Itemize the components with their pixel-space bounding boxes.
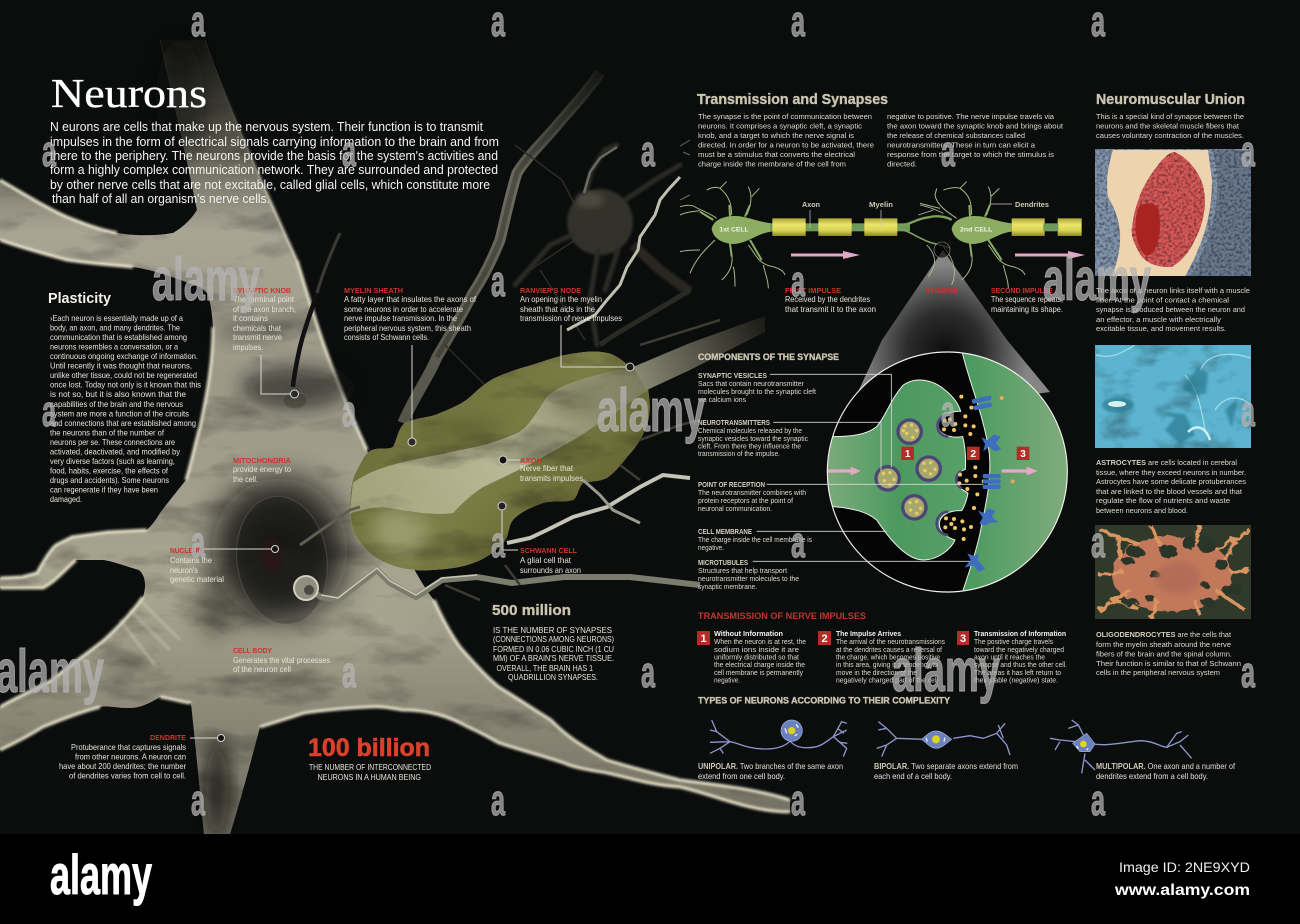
stat: 100 billion — [308, 734, 431, 782]
first cell dendrites and body: 1st CELL — [719, 227, 749, 234]
intro column 2: directed. — [887, 162, 917, 168]
component: cell membrane: The charge inside the cell membrane is — [698, 537, 812, 544]
component: neurotransmitters: cleft. From there they influence the — [698, 444, 801, 450]
dark shading on the cell body — [120, 40, 430, 838]
component: neurotransmitters: NEUROTRANSMITTERS — [698, 420, 770, 427]
step 3: axon until it reaches the — [974, 654, 1045, 662]
step 2: The Impulse Arrives — [836, 631, 901, 638]
plasticity body text: activated, deactivated, and modified by — [50, 446, 181, 456]
stat: 500 million: OVERALL, THE BRAIN HAS 1 — [496, 663, 593, 673]
neuron main body — [0, 40, 790, 838]
watermarks: a — [1091, 776, 1105, 825]
intro text: impulses in the form of electrical signals carrying information to the brain and from — [50, 134, 499, 149]
caption: bipolar — [874, 761, 1018, 781]
label: axon: Nerve fiber that — [520, 463, 574, 473]
label: synaptic knob: chemicals that — [233, 323, 282, 333]
impulse arrow 1 — [791, 251, 860, 259]
intro text: form a highly complex communication network. They are surrounded and protected — [50, 162, 498, 177]
axon terminal branches — [900, 205, 954, 285]
step 1: negative. — [714, 678, 740, 685]
stat: 100 billion: THE NUMBER OF INTERCONNECTED — [309, 762, 431, 772]
label: cell body: Generates the vital processes — [233, 655, 330, 665]
caption: multipolar: MULTIPOLAR. One axon and a number of — [1096, 761, 1236, 771]
watermarks: a — [42, 127, 56, 176]
label: second impulse: The sequence repeats, — [991, 294, 1063, 304]
caption: bipolar: BIPOLAR. Two separate axons extend from — [874, 761, 1018, 771]
text: astrocytes: Astrocytes have some delicate protuberances — [1096, 479, 1247, 486]
label: synaptic knob — [233, 286, 296, 352]
section heading: TRANSMISSION OF NERVE IMPULSES — [698, 611, 866, 622]
diagram labels: Myelin — [869, 200, 893, 209]
postsynaptic cell — [962, 350, 1070, 595]
label: ranvier's node — [520, 286, 622, 323]
text: oligodendrocytes: fibers of the brain and the spinal column. — [1096, 652, 1232, 658]
step 3: their stable (negative) state. — [974, 678, 1058, 685]
text: astrocytes: tissue, where they exceed neurons in number. — [1096, 470, 1246, 477]
watermarks: a — [491, 257, 505, 306]
intro column 2: neurotransmitters. These in turn can elicit a — [887, 142, 1035, 150]
text: neuron to muscle link: fiber. At the point of contact a chemical — [1096, 298, 1229, 304]
label: first impulse: Received by the dendrites — [785, 294, 870, 304]
label: synaptic knob: SYNAPTIC KNOB — [233, 286, 291, 295]
label: ranvier's node: An opening in the myelin — [520, 294, 602, 304]
footer url: www.alamy.com — [1114, 882, 1250, 899]
plasticity body text: damaged. — [50, 494, 82, 504]
watermarks: a — [791, 776, 805, 825]
watermarks: a — [1241, 648, 1255, 697]
label: myelin sheath: A fatty layer that insulates the axons of — [344, 294, 477, 304]
plasticity body text: food, habits, exercise, the effects of — [50, 466, 169, 476]
label: synaptic knob: it contains — [233, 313, 268, 323]
panel: transmission and synapses — [680, 91, 1085, 420]
watermarks: a — [342, 127, 356, 176]
heading: Neuromuscular Union — [1096, 92, 1245, 108]
stat: 500 million: IS THE NUMBER OF SYNAPSES — [493, 625, 612, 635]
intro column 1: neurons. It comprises a synaptic cleft, a synaptic — [698, 124, 863, 130]
component: microtubules — [698, 560, 799, 591]
intro column 1 — [698, 114, 874, 168]
step 2: the charge, which becomes positive — [836, 654, 940, 662]
step 2: The arrival of the neurotransmissions — [836, 639, 945, 646]
step 3: toward the negatively charged — [974, 647, 1064, 654]
icon: multipolar neuron — [1050, 720, 1192, 773]
label: synaptic knob: The terminal point — [233, 294, 295, 304]
step 3 — [957, 631, 1067, 685]
component: neurotransmitters: synaptic vesicles toward the synaptic — [698, 436, 808, 443]
second cell: 2nd CELL — [960, 227, 992, 234]
label: synapse: SYNAPSE — [925, 286, 958, 295]
watermarks: a — [791, 257, 805, 306]
icon: bipolar neuron — [877, 722, 1010, 757]
intro text: neurons and the skeletal muscle fibers that — [1096, 124, 1239, 130]
watermarks: a — [191, 776, 205, 825]
label: first impulse — [785, 286, 876, 314]
text: neuron to muscle link: synapse is produced between the neuron and — [1096, 307, 1245, 314]
watermarks: a — [791, 518, 805, 567]
caption: unipolar: UNIPOLAR. Two branches of the same axon — [698, 761, 843, 771]
plasticity body text: very diverse factors (such as learning, — [50, 456, 175, 466]
intro text: there to the periphery. The neurons provide the basis for the system's activities and — [50, 148, 498, 163]
stat: 500 million: FORMED IN 0.06 CUBIC INCH (1 CU — [493, 644, 614, 654]
label: schwann cell — [520, 546, 581, 575]
diagram labels: Axon — [802, 200, 820, 209]
component: synaptic vesicles: SYNAPTIC VESICLES — [698, 373, 767, 380]
intro column 1: directed. In order for a neuron to be activated, there — [698, 142, 874, 150]
presynaptic terminal — [823, 380, 968, 560]
label: myelin sheath: peripheral nervous system, this sheath — [344, 323, 471, 333]
component: point of reception — [698, 482, 806, 513]
plasticity body text: system are more a function of the circuits — [50, 408, 189, 418]
label: dendrite: of dendrites varies from cell to cell. — [69, 770, 186, 780]
component: microtubules: MICROTUBULES — [698, 560, 748, 567]
component: cell membrane: CELL MEMBRANE — [698, 529, 752, 536]
magnified synapse circle — [753, 350, 1070, 595]
label: dendrite: DENDRITE — [150, 733, 186, 742]
label: mitochondria: MITOCHONDRIA — [233, 456, 291, 465]
intro text: causes voluntary contraction of the muscles. — [1096, 133, 1244, 140]
panel: plasticity — [48, 290, 201, 504]
impulse arrows — [827, 467, 861, 475]
label: nucleus: NUCLEUS — [170, 546, 202, 555]
callout leader lines — [190, 325, 634, 742]
intro column 1: knob, and a target to which the nerve signal is — [698, 133, 855, 140]
component: synaptic vesicles: molecules brought to the synaptic cleft — [698, 389, 816, 396]
stat: 100 billion: NEURONS IN A HUMAN BEING — [318, 772, 421, 782]
plasticity body text: neurons per se. These connections are — [50, 437, 175, 447]
intro text — [50, 119, 499, 206]
vesicles — [876, 415, 962, 535]
photo: neuromuscular junction micrograph — [1095, 149, 1251, 276]
text: neuron to muscle link: The axon of a neuron links itself with a muscle — [1096, 288, 1250, 295]
label: ranvier's node: RANVIER'S NODE — [520, 286, 581, 295]
watermarks: a — [191, 518, 205, 567]
watermarks: a — [1091, 518, 1105, 567]
watermarks: a — [941, 387, 955, 436]
step markers: 1 — [905, 449, 911, 460]
step 3: The areas it has left return to — [974, 670, 1061, 677]
text: neuron to muscle link — [1096, 288, 1250, 333]
label: nucleus: genetic material — [170, 574, 224, 584]
step 1 — [697, 631, 806, 685]
footer bar — [0, 834, 1300, 924]
label: schwann cell: surrounds an axon — [520, 565, 581, 575]
myelin blocks — [772, 218, 1082, 236]
axon — [770, 223, 910, 231]
photo: astrocytes micrograph — [1095, 345, 1251, 448]
stat: 500 million: 500 million — [492, 602, 571, 619]
second cell — [920, 182, 1058, 288]
label: nucleus — [170, 546, 224, 584]
intro text: by other nerve cells that are not excitable, called glial cells, which constitute more — [50, 177, 490, 192]
step 2: move in the direction of the — [836, 670, 917, 677]
label: schwann cell: SCHWANN CELL — [520, 546, 577, 555]
step markers — [901, 447, 1029, 460]
receptors — [965, 395, 1001, 572]
step 2: in this area, giving it a tendency to — [836, 662, 938, 669]
intro column 2: the release of chemical substances called — [887, 133, 1025, 140]
label: dendrite — [59, 733, 186, 780]
component: synaptic vesicles: via calcium ions — [698, 397, 746, 404]
illustration: large neuron scene — [0, 40, 790, 838]
caption: multipolar: dendrites extend from a cell body. — [1096, 771, 1208, 781]
intro column 2: negative to positive. The nerve impulse travels via — [887, 114, 1054, 121]
intro column 1: charge inside the membrane of the cell from — [698, 162, 846, 168]
label: myelin sheath: consists of Schwann cells. — [344, 332, 429, 342]
plasticity body text — [50, 313, 201, 504]
plasticity body text: drugs and accidents). Some neurons — [50, 475, 169, 485]
caption: bipolar: each end of a cell body. — [874, 771, 952, 781]
impulse arrow 2 — [1015, 251, 1085, 259]
plasticity body text: and connections that are established among — [50, 418, 196, 428]
text: neuron to muscle link: an effector, a muscle with electrically — [1096, 317, 1222, 324]
watermarks: alamy — [152, 246, 260, 313]
plasticity heading: Plasticity — [48, 290, 112, 307]
watermarks: alamy — [0, 638, 104, 705]
step 2: 2 — [821, 633, 828, 645]
label: dendrite: Protuberance that captures signals — [71, 742, 186, 752]
label: second impulse — [991, 286, 1063, 314]
components heading: COMPONENTS OF THE SYNAPSE — [698, 352, 839, 362]
panel: types of neurons — [698, 696, 1236, 781]
label: axon: AXON — [520, 456, 542, 465]
plasticity body text: continuous ongoing exchange of information. — [50, 351, 198, 361]
first cell dendrites and body — [680, 182, 785, 288]
footer logo: alamy — [50, 843, 152, 906]
label: mitochondria: provide energy to — [233, 464, 291, 474]
label: mitochondria: the cell. — [233, 474, 258, 484]
component: point of reception: neuronal communication. — [698, 506, 772, 513]
plasticity body text: the neurons than of the number of — [50, 427, 165, 437]
panel: components of the synapse — [698, 350, 1070, 595]
plasticity body text: once lost. Today not only is it known that this — [50, 380, 201, 390]
types heading: TYPES OF NEURONS ACCORDING TO THEIR COMPLEXITY — [698, 696, 951, 706]
step 3: synapse and thus the other cell. — [974, 662, 1067, 669]
caption: unipolar: extend from one cell body. — [698, 771, 785, 781]
label: mitochondria — [233, 456, 291, 484]
intro text — [1096, 114, 1244, 140]
component: microtubules: neurotransmitter molecules to the — [698, 576, 799, 583]
nerve fibers in front — [294, 320, 720, 600]
text: oligodendrocytes: Their function is similar to that of Schwann — [1096, 661, 1241, 668]
watermarks: a — [491, 518, 505, 567]
label: synaptic knob: transmit nerve — [233, 332, 282, 342]
label: cell body: of the neuron cell — [233, 664, 291, 674]
synaptic knob fiber — [283, 233, 340, 408]
component: neurotransmitters: transmission of the impulse. — [698, 451, 780, 458]
intro text: than half of all an organism's nerve cells. — [52, 191, 270, 206]
diagram labels: Dendrites — [1015, 200, 1049, 209]
component: neurotransmitters: Chemical molecules released by the — [698, 428, 802, 435]
caption: unipolar — [698, 761, 843, 781]
watermarks: a — [941, 127, 955, 176]
component: synaptic vesicles: Sacs that contain neurotransmitter — [698, 381, 805, 388]
step markers: 3 — [1020, 449, 1026, 460]
intro text: N eurons are cells that make up the nervous system. Their function is to transmit — [50, 119, 483, 134]
label: cell body: CELL BODY — [233, 646, 272, 655]
step 2: negatively charged part of the cell — [836, 678, 938, 685]
step 1: 1 — [700, 633, 707, 645]
label: second impulse: maintaining its shape. — [991, 304, 1063, 314]
text: astrocytes: between neurons and blood. — [1096, 508, 1188, 515]
text: astrocytes — [1096, 460, 1247, 515]
label: synaptic knob: impulses. — [233, 342, 263, 352]
text: astrocytes: regulate the flow of nutrients and waste — [1096, 498, 1230, 505]
intro text: This is a special kind of synapse between the — [1096, 114, 1244, 121]
step 2: at the dendrites causes a reversal of — [836, 647, 942, 654]
component: point of reception: protein receptors at the point of — [698, 498, 793, 505]
label: myelin sheath: MYELIN SHEATH — [344, 286, 403, 295]
leader lines — [753, 374, 983, 561]
watermarks: a — [342, 387, 356, 436]
step 1: When the neuron is at rest, the — [714, 639, 806, 646]
stat: 500 million: (CONNECTIONS AMONG NEURONS) — [493, 634, 614, 644]
stat: 100 billion: 100 billion — [308, 734, 430, 762]
watermarks: a — [1241, 387, 1255, 436]
icon: unipolar neuron — [710, 720, 847, 757]
intro column 2: the axon toward the synaptic knob and brings about — [887, 124, 1063, 130]
label: nucleus: neuron's — [170, 565, 198, 575]
nucleus outline — [236, 496, 328, 624]
panel: transmission of nerve impulses — [697, 611, 1067, 685]
label: axon — [520, 456, 583, 483]
label: synaptic knob: of the axon branch, — [233, 304, 296, 314]
step 1: uniformly distributed so that — [714, 654, 799, 662]
component: point of reception: The neurotransmitter combines with — [698, 490, 806, 497]
intro column 1: The synapse is the point of communication between — [698, 114, 872, 121]
component: point of reception: POINT OF RECEPTION — [698, 482, 765, 489]
label: ranvier's node: sheath that aids in the — [520, 304, 595, 314]
label: axon: transmits impulses — [520, 473, 583, 483]
step markers: 2 — [971, 449, 977, 460]
text: oligodendrocytes: form the myelin sheath around the nerve — [1096, 642, 1231, 649]
text: oligodendrocytes: OLIGODENDROCYTES are the cells that — [1096, 632, 1231, 639]
step 1: sodium ions inside it are — [714, 647, 799, 654]
diagram labels — [802, 200, 1049, 228]
neurotransmitter dots — [882, 395, 1015, 541]
photo: oligodendrocytes micrograph — [1095, 525, 1251, 619]
myelin sheath — [300, 316, 765, 570]
intro column 2 — [887, 114, 1063, 168]
component: microtubules: Structures that help transport — [698, 568, 787, 575]
step 1: the electrical charge inside the — [714, 662, 805, 669]
label: myelin sheath: nerve impulse transmission. In the — [344, 313, 457, 323]
component: microtubules: synaptic membrane. — [698, 584, 757, 591]
step 1: Without Information — [714, 631, 783, 638]
watermarks: a — [641, 648, 655, 697]
plasticity body text: neurons resembles a conversation, or a — [50, 342, 178, 352]
intro column 2: response from the target to which the stimulus is — [887, 152, 1055, 159]
watermarks: a — [491, 776, 505, 825]
watermarks: a — [641, 127, 655, 176]
watermarks: alamy — [892, 637, 1000, 704]
label: cell body — [233, 646, 330, 674]
label: myelin sheath: some neurons in order to accelerate — [344, 304, 463, 314]
component: neurotransmitters — [698, 420, 808, 458]
caption: multipolar — [1096, 761, 1236, 781]
plasticity body text: ›Each neuron is essentially made up of a — [50, 313, 183, 323]
plasticity body text: is not so, but it is also known that the — [50, 389, 186, 399]
stat: 500 million: QUADRILLION SYNAPSES. — [508, 672, 598, 682]
footer image id: Image ID: 2NE9XYD — [1119, 859, 1250, 875]
plasticity body text: communication that is established among — [50, 332, 187, 342]
component: cell membrane — [698, 529, 812, 552]
plasticity body text: capabilities of the brain and the nervous — [50, 399, 183, 409]
text: astrocytes: ASTROCYTES are cells located in cerebral — [1096, 460, 1237, 467]
step 1: cell membrane is permanently — [714, 670, 803, 677]
diagram: two connected nerve cells — [680, 182, 1082, 288]
watermarks: alamy — [597, 377, 705, 444]
cone linking synapse to magnified view — [845, 250, 1050, 420]
watermarks: a — [42, 387, 56, 436]
text: oligodendrocytes: cells in the peripheral nervous system — [1096, 670, 1220, 677]
label: nucleus: Contains the — [170, 555, 212, 565]
watermarks: alamy — [1043, 246, 1151, 313]
label: myelin sheath — [344, 286, 477, 342]
label: schwann cell: A glial cell that — [520, 555, 572, 565]
text: astrocytes: that are linked to the blood vessels and that — [1096, 489, 1242, 496]
heading: Transmission and Synapses — [697, 91, 888, 108]
label: ranvier's node: transmission of nerve impulses — [520, 313, 622, 323]
plasticity body text: body, an axon, and many dendrites. The — [50, 322, 180, 332]
panel: neuromuscular union — [1095, 92, 1251, 677]
label: first impulse: FIRST IMPULSE — [785, 286, 841, 295]
label: dendrite: from other neurons. A neuron can — [75, 752, 186, 762]
step 3: The positive charge travels — [974, 639, 1053, 646]
label: second impulse: SECOND IMPULSE — [991, 286, 1053, 295]
plasticity body text: can regenerate if they have been — [50, 484, 158, 494]
background neuron and fibers — [403, 73, 690, 423]
label: first impulse: that transmit it to the axon — [785, 304, 876, 314]
step 3: 3 — [960, 633, 966, 645]
text: oligodendrocytes — [1096, 632, 1241, 677]
step 2 — [818, 631, 945, 685]
plasticity body text: Until recently it was thought that neurons, — [50, 361, 192, 371]
component: synaptic vesicles — [698, 373, 816, 404]
step 3: Transmission of Information — [974, 631, 1066, 638]
plasticity body text: unlike other tissue, could not be regenerated — [50, 370, 197, 380]
component: cell membrane: negative. — [698, 545, 724, 552]
title: Neurons — [51, 70, 207, 116]
text: neuron to muscle link: excitable tissue, and movement results. — [1096, 326, 1226, 333]
watermarks: a — [1241, 127, 1255, 176]
label: dendrite: have about 200 dendrites; the number — [59, 761, 186, 771]
intro column 1: must be a stimulus that converts the electrical — [698, 152, 855, 159]
stat: 500 million: MM) OF A BRAIN'S NERVE TISSUE. — [493, 653, 614, 663]
stat: 500 million — [492, 602, 614, 682]
watermarks: a — [342, 648, 356, 697]
